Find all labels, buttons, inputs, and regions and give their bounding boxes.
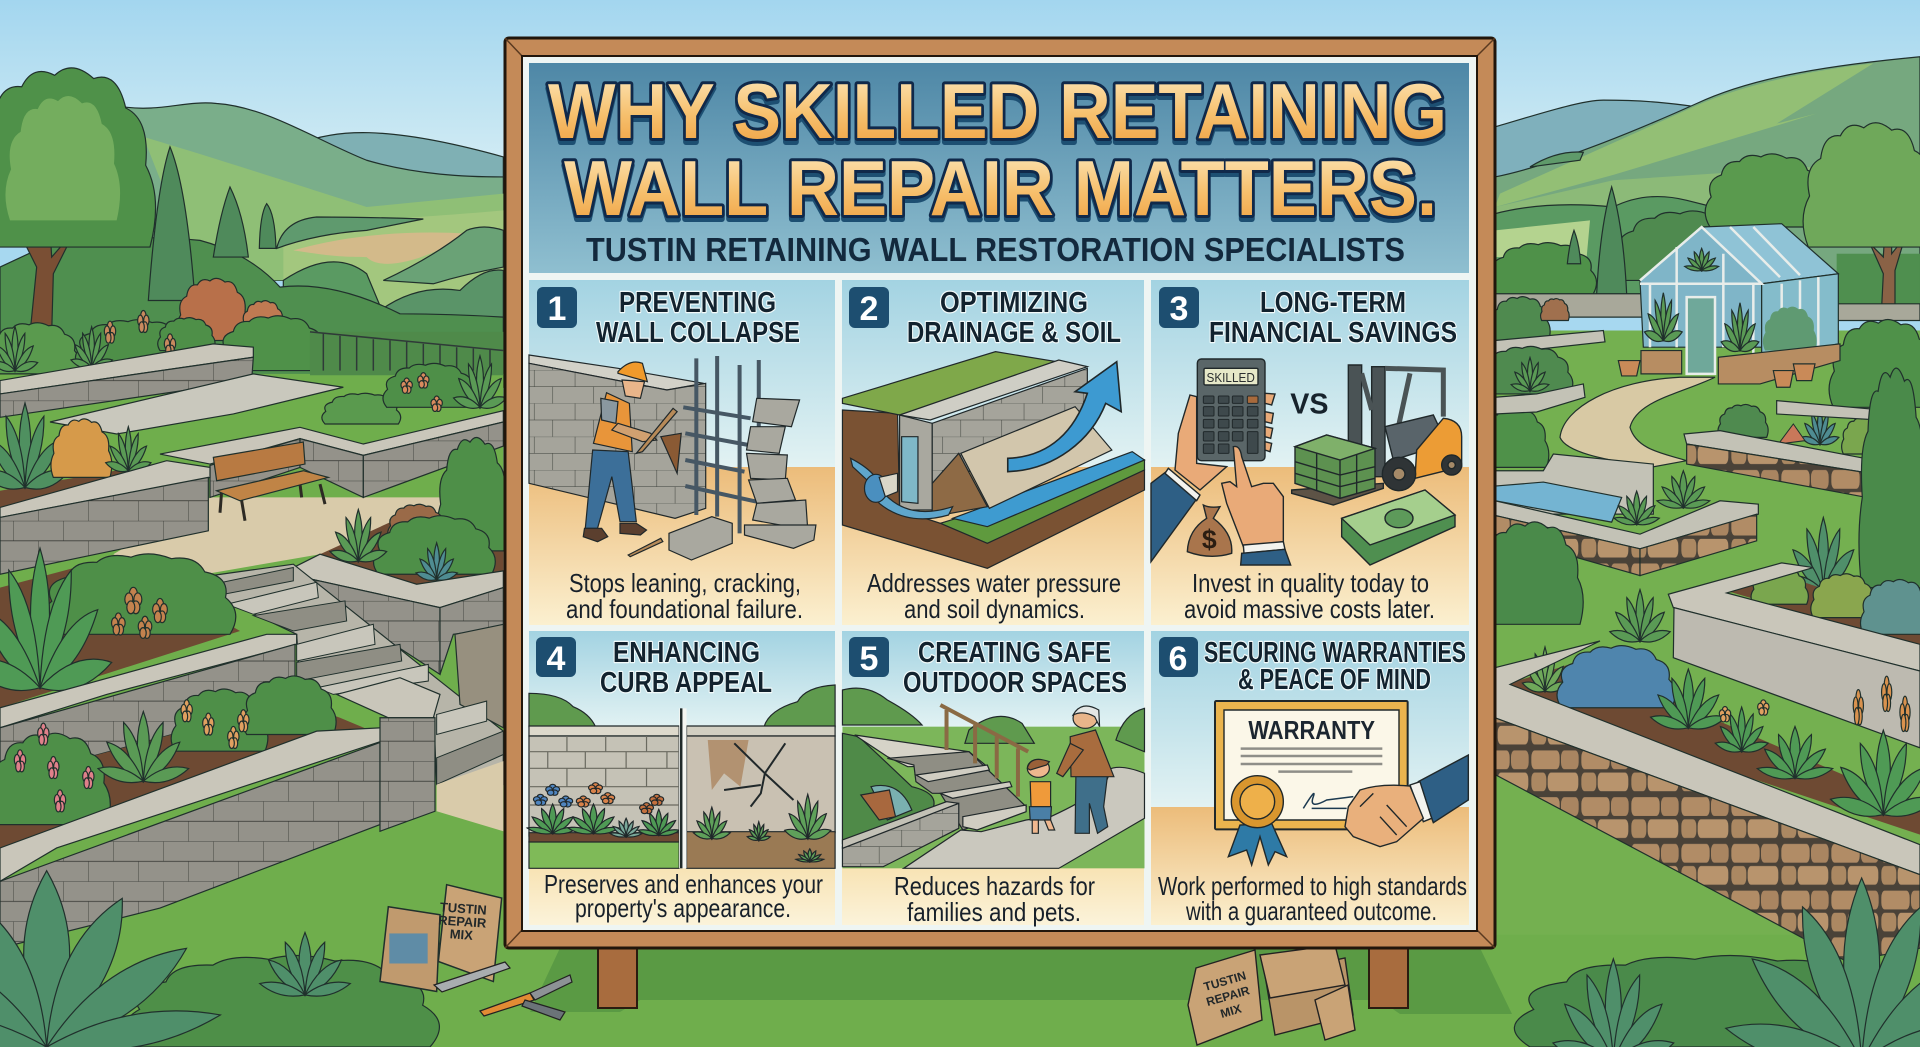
heading <box>907 287 1121 349</box>
illustration: safe steps, child and grandparent <box>842 688 1144 868</box>
heading: & PEACE OF MIND <box>1238 664 1431 696</box>
bag label text: TUSTIN <box>439 899 487 918</box>
heading: WALL COLLAPSE <box>596 317 800 349</box>
fence <box>310 332 503 375</box>
illustration: warranty certificate and handshake <box>1215 701 1468 865</box>
repair mix bag labelled <box>438 885 502 982</box>
panel 1: preventing wall collapse <box>529 280 835 625</box>
description: Stops leaning, cracking, <box>569 568 801 598</box>
repair mix bag plain <box>380 907 440 992</box>
panel 4: enhancing curb appeal <box>527 631 835 925</box>
curved garden path <box>1560 377 1715 467</box>
stone steps <box>173 564 503 831</box>
number badge 2: 2 <box>860 290 878 328</box>
description <box>894 871 1095 927</box>
left garden scene <box>0 68 509 1047</box>
number badge 4 <box>536 637 576 678</box>
front bush right <box>1514 956 1908 1047</box>
greenhouse <box>1618 224 1840 387</box>
stacked cash on pallet <box>1295 435 1375 498</box>
lawn backdrop left <box>0 374 503 1047</box>
top planter bed <box>0 310 253 417</box>
heading: SECURING WARRANTIES <box>1204 637 1466 669</box>
third tier wall <box>0 403 210 574</box>
second tier wall <box>113 411 503 581</box>
heading: CREATING SAFE <box>918 637 1111 669</box>
tree left <box>0 68 156 334</box>
description: Work performed to high standards <box>1158 871 1467 901</box>
illustration: repaired versus damaged wall <box>527 685 835 868</box>
panel 3: long-term financial savings <box>1151 280 1469 625</box>
hands and calculator: $ <box>1202 524 1217 554</box>
description: with a guaranteed outcome. <box>1185 896 1437 926</box>
wall pillar <box>337 678 440 831</box>
planter beds right <box>1684 401 1890 497</box>
front agave left <box>0 871 223 1047</box>
tree right <box>1803 123 1920 307</box>
heading: PREVENTING <box>619 287 776 319</box>
number badge 5 <box>849 637 889 678</box>
illustration: calculator versus forklift of cash <box>1151 359 1462 565</box>
heading <box>600 637 772 699</box>
header panel <box>529 63 1469 273</box>
background hedge <box>0 238 503 387</box>
description <box>566 568 803 624</box>
panel 5: creating safe outdoor spaces <box>842 631 1144 927</box>
wooden bench <box>213 442 328 521</box>
description <box>1184 568 1435 624</box>
heading <box>596 287 800 349</box>
description <box>1158 871 1467 926</box>
cypress trees <box>148 147 276 300</box>
front agave right middle <box>1552 959 1675 1047</box>
distant hills left <box>123 103 503 341</box>
title <box>548 67 1447 232</box>
fourth tier wall with plants <box>0 548 297 781</box>
heading <box>1209 287 1457 349</box>
hands and calculator: SKILLED <box>1206 371 1255 385</box>
front retaining wall <box>0 728 382 948</box>
grandparent <box>1057 706 1114 833</box>
rust shrubs <box>177 278 327 371</box>
concrete planter <box>1668 368 1920 748</box>
number badge 1: 1 <box>548 290 566 328</box>
flat cash stack <box>1342 490 1455 565</box>
description: Preserves and enhances your <box>544 869 823 899</box>
illustration: wall drainage cross-section <box>842 352 1144 568</box>
illustration: calculator versus forklift of cash: VS <box>1290 388 1328 420</box>
heading: DRAINAGE & SOIL <box>907 317 1121 349</box>
heading <box>903 637 1127 699</box>
heading: OPTIMIZING <box>940 287 1088 319</box>
reflecting pool <box>1495 454 1758 576</box>
brown stone wall <box>1495 641 1920 961</box>
bag label text under sign: TUSTIN <box>1202 968 1248 994</box>
number badge 5: 5 <box>860 640 878 678</box>
heading: CURB APPEAL <box>600 667 772 699</box>
number badge 3: 3 <box>1170 290 1188 328</box>
background: lawn <box>0 600 1920 1047</box>
tools on lawn <box>434 962 572 1020</box>
shrub by pool <box>1476 522 1583 624</box>
background: sky <box>0 0 1920 200</box>
title: WALL REPAIR MATTERS. <box>564 144 1437 232</box>
description: and foundational failure. <box>566 594 803 624</box>
number badge 2 <box>849 287 889 328</box>
bag label text: MIX <box>449 926 474 943</box>
panel 6: securing warranties and peace of mind <box>1151 631 1469 926</box>
description: Addresses water pressure <box>867 568 1121 598</box>
number badge 6 <box>1159 637 1198 678</box>
number badge 3 <box>1159 287 1199 328</box>
front agave right <box>1724 878 1920 1047</box>
hands and calculator <box>1151 359 1291 565</box>
description: Reduces hazards for <box>894 871 1095 901</box>
description: property's appearance. <box>575 893 791 923</box>
forklift <box>1292 365 1462 505</box>
fifth tier bed <box>0 676 380 855</box>
bag label text: REPAIR <box>438 912 487 931</box>
heading <box>1204 637 1466 696</box>
number badge 6: 6 <box>1169 640 1187 678</box>
description: avoid massive costs later. <box>1184 594 1435 624</box>
illustration: warranty certificate and handshake: WARRANTY <box>1248 715 1375 745</box>
heading: OUTDOOR SPACES <box>903 667 1127 699</box>
number badge 1 <box>537 287 577 328</box>
title: WHY SKILLED RETAINING <box>548 67 1447 155</box>
description <box>544 869 823 923</box>
posts <box>598 948 1408 1008</box>
repair mix bags under sign <box>1188 945 1355 1045</box>
panel 2: optimizing drainage and soil <box>842 280 1144 625</box>
distant hills right <box>1495 57 1920 307</box>
bag label text under sign <box>1202 968 1252 1021</box>
heading: ENHANCING <box>613 637 760 669</box>
right garden scene <box>1476 57 1920 1047</box>
bag label text under sign: REPAIR <box>1205 983 1252 1009</box>
heading: LONG-TERM <box>1260 287 1406 319</box>
right planter bed <box>293 437 509 674</box>
number badge 4: 4 <box>547 640 566 678</box>
bag label text <box>438 899 487 943</box>
paved terrace and lawn <box>50 356 507 434</box>
subtitle: TUSTIN RETAINING WALL RESTORATION SPECIALISTS <box>586 231 1405 268</box>
shadow under board <box>530 948 1512 1014</box>
front bush <box>124 956 439 1047</box>
description: and soil dynamics. <box>904 594 1085 624</box>
background trees right <box>1489 154 1920 314</box>
description: Invest in quality today to <box>1192 568 1429 598</box>
description: families and pets. <box>907 897 1081 927</box>
child <box>1027 759 1055 833</box>
small agave <box>259 932 351 1001</box>
front planter plants <box>1500 590 1920 835</box>
illustration: worker repairing wall <box>529 355 816 560</box>
sign board frame <box>505 38 1495 948</box>
garden wall and lawn <box>1495 294 1920 935</box>
heading: FINANCIAL SAVINGS <box>1209 317 1457 349</box>
back hedges right <box>1477 297 1920 467</box>
description <box>867 568 1121 624</box>
bag label text under sign: MIX <box>1219 1001 1243 1021</box>
